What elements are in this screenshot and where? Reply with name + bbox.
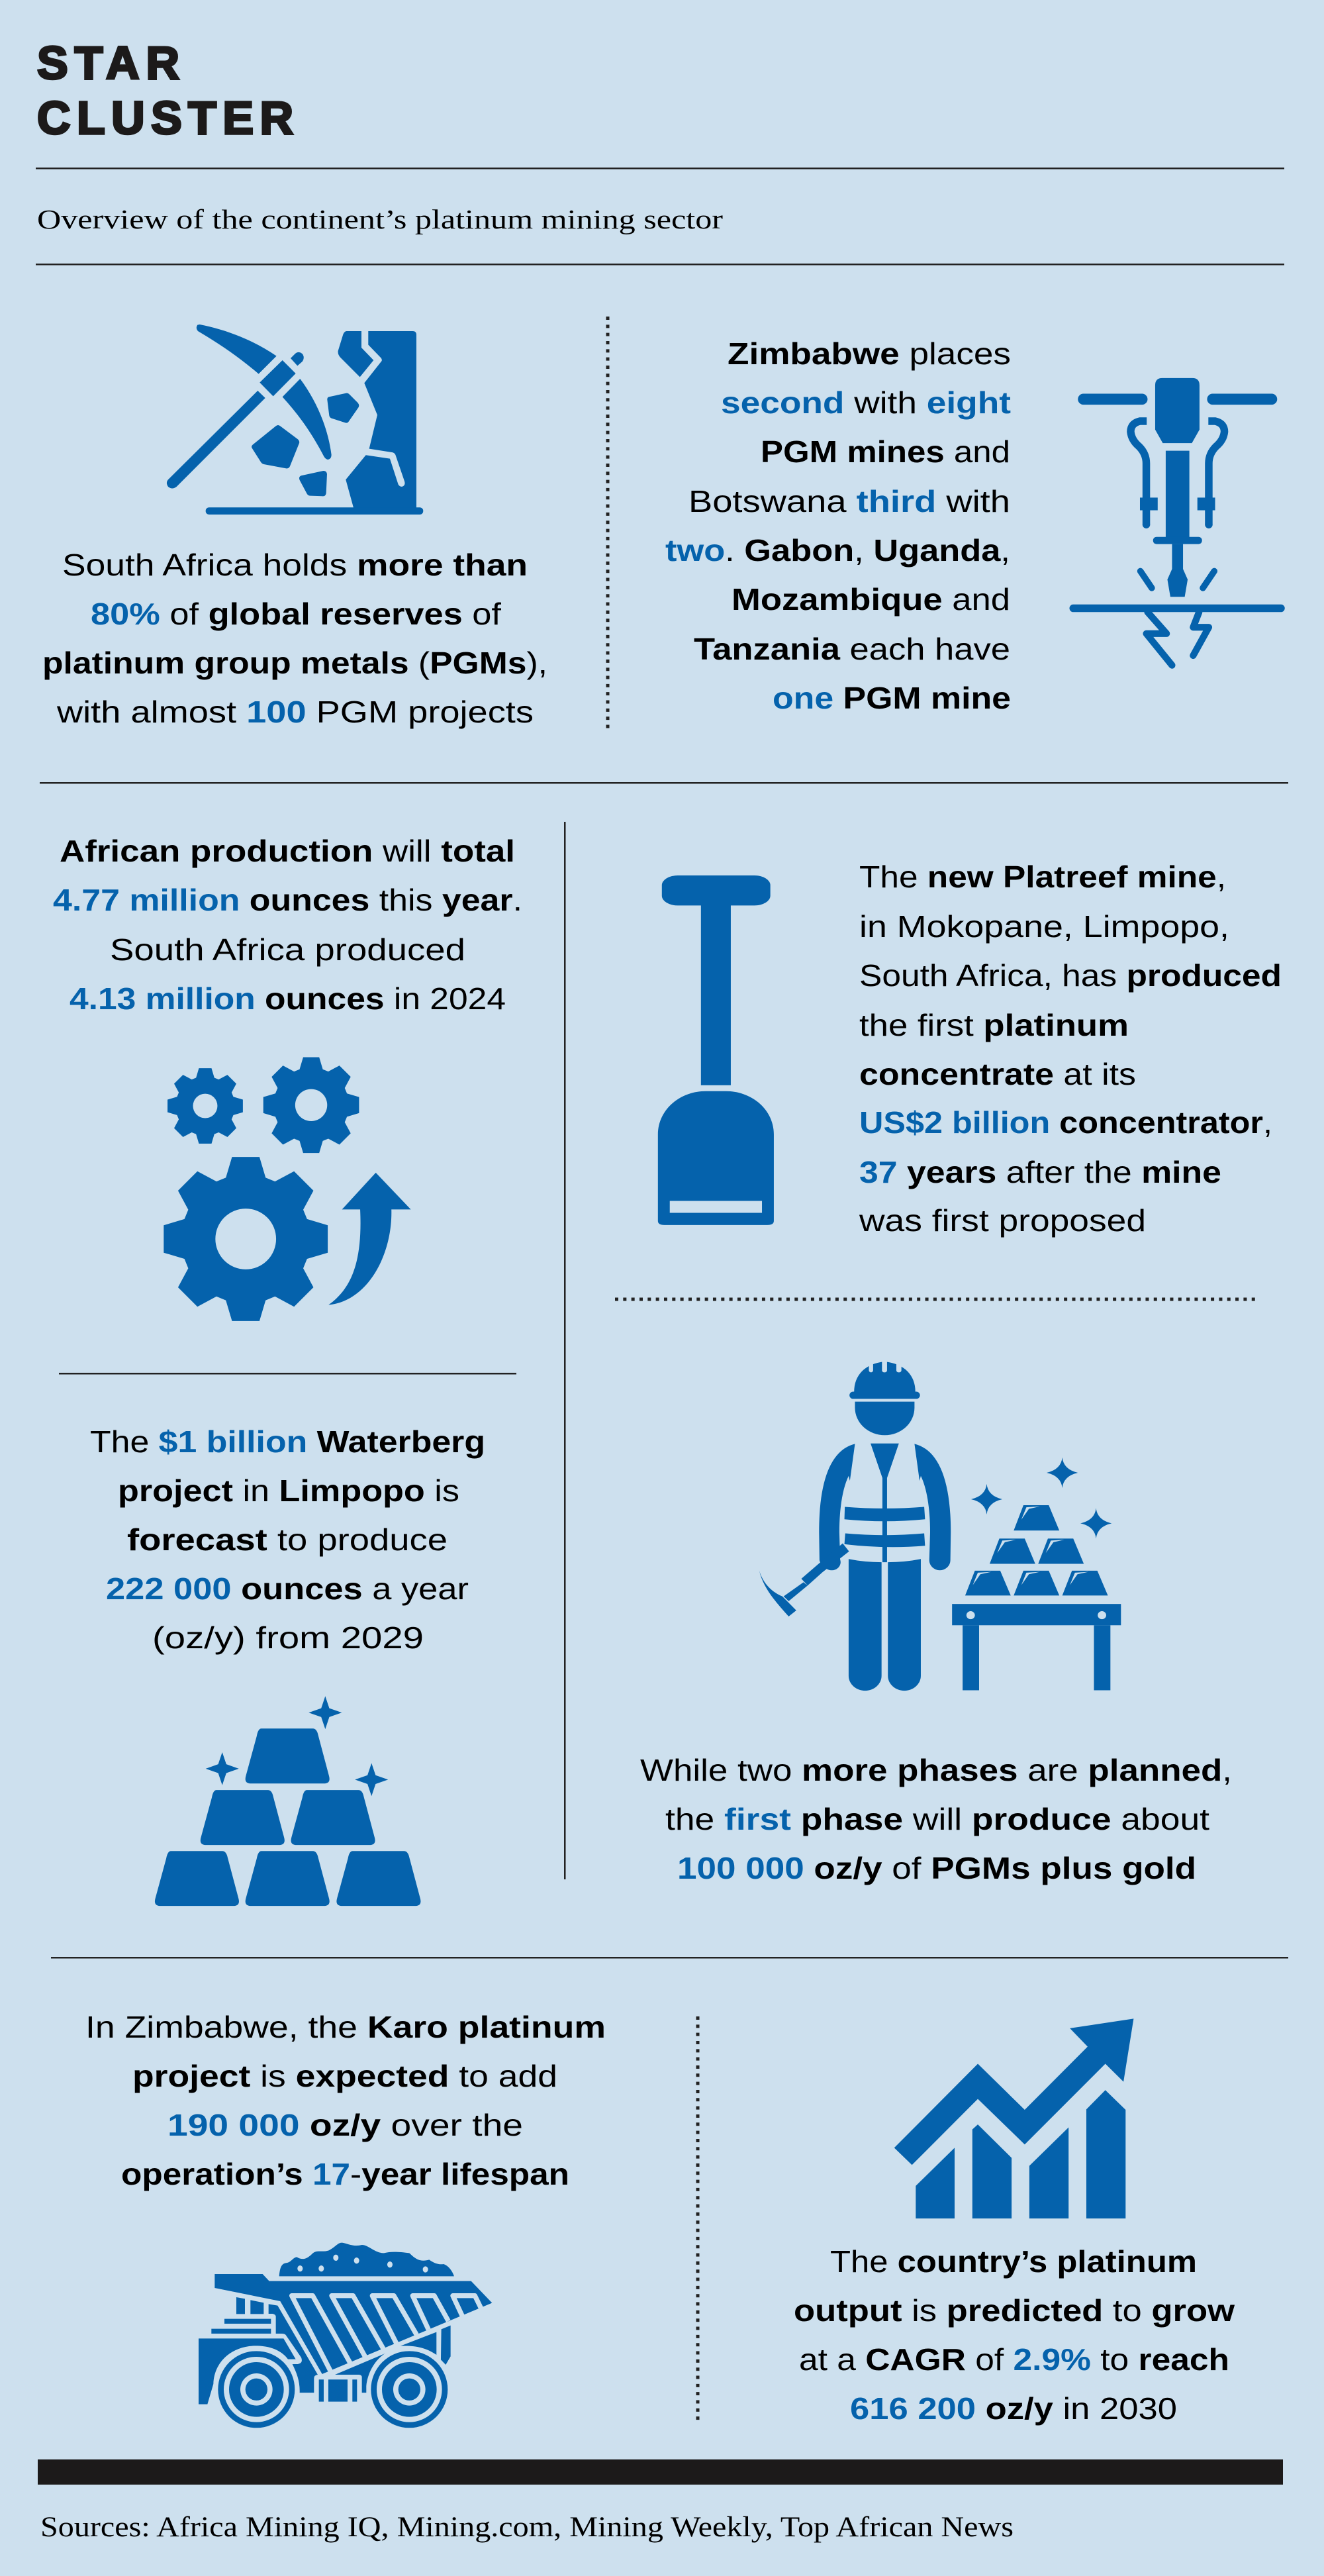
- text: platinum output growth: at a CAGR of 2.9% to reach: [799, 2342, 1229, 2377]
- icon: jackhammer: [1069, 378, 1285, 666]
- text: South Africa reserves: with almost 100 PGM projects: [56, 695, 534, 729]
- footer bar: [38, 2459, 1283, 2485]
- text: Waterberg project: 222 000 ounces a year: [106, 1571, 469, 1606]
- text: first phase: [640, 1753, 1232, 1885]
- text: Waterberg project: project in Limpopo is: [118, 1473, 459, 1508]
- text: platinum output growth: The country’s platinum: [830, 2244, 1197, 2279]
- title: [37, 37, 293, 144]
- text: Zimbabwe second: PGM mines and: [761, 434, 1010, 469]
- text: Platreef mine: 37 years after the mine: [859, 1155, 1221, 1189]
- text: Platreef mine: South Africa, has produced: [859, 958, 1282, 993]
- text: Zimbabwe second: one PGM mine: [773, 681, 1011, 715]
- icon: rising chart: [894, 2018, 1133, 2218]
- icon: pickaxe and rock wall: [167, 324, 423, 515]
- text: African production: [53, 834, 522, 1016]
- text: Platreef mine: [859, 860, 1282, 1238]
- text: Zimbabwe second: Tanzania each have: [694, 632, 1010, 666]
- text: South Africa reserves: platinum group metals (PGMs ),: [42, 646, 547, 680]
- text: platinum output growth: output is predicted to grow: [794, 2293, 1235, 2328]
- text: South Africa reserves: South Africa holds more than: [62, 548, 528, 582]
- icon: gears and up arrow: [164, 1057, 411, 1321]
- text: South Africa reserves: [42, 548, 547, 729]
- text: platinum output growth: [794, 2244, 1235, 2426]
- title: STAR: [37, 37, 179, 89]
- text: Karo platinum project: 190 000 oz/y over the: [167, 2108, 523, 2142]
- text: Karo platinum project: operation’s 17-year lifespan: [121, 2157, 569, 2191]
- icon: miner and gold bars on a table: [759, 1360, 1121, 1691]
- icon: haul truck: [199, 2243, 492, 2428]
- text: Waterberg project: (oz/y) from 2029: [152, 1620, 424, 1655]
- text: Zimbabwe second: Mozambique and: [732, 582, 1010, 617]
- text: Waterberg project: forecast to produce: [127, 1522, 448, 1557]
- text: Platreef mine: was first proposed: [859, 1203, 1146, 1238]
- text: South Africa reserves: 80% of global reserves of: [91, 597, 501, 631]
- text: first phase: the first phase will produce about: [665, 1802, 1209, 1836]
- title: CLUSTER: [37, 92, 293, 144]
- text: African production: 4.13 million ounces in 2024: [70, 981, 506, 1016]
- text: Platreef mine: US$2 billion concentrator ,: [859, 1105, 1272, 1140]
- text: Zimbabwe second: Zimbabwe places: [728, 336, 1011, 371]
- text: African production: 4.77 million ounces this year .: [53, 883, 522, 917]
- text: Zimbabwe second: two. Gabon , Uganda ,: [665, 533, 1010, 568]
- icon: stacked gold bars: [155, 1696, 420, 1906]
- text: Waterberg project: The $1 billion Waterberg: [90, 1424, 485, 1459]
- text: Platreef mine: The new Platreef mine ,: [859, 860, 1226, 894]
- text: Platreef mine: the first platinum: [859, 1008, 1129, 1042]
- text: African production: South Africa produced: [110, 932, 465, 967]
- icon: shovel: [658, 875, 774, 1225]
- text: Karo platinum project: In Zimbabwe, the Karo platinum: [85, 2010, 606, 2044]
- text: Platreef mine: concentrate at its: [859, 1057, 1136, 1091]
- text: Karo platinum project: project is expected to add: [132, 2059, 557, 2093]
- text: African production: African production will total: [60, 834, 515, 868]
- sources: Sources: Africa Mining IQ, Mining.com, Mining Weekly, Top African News: [40, 2512, 1014, 2543]
- text: Zimbabwe second: Botswana third with: [688, 484, 1010, 519]
- text: Karo platinum project: [85, 2010, 606, 2191]
- text: Zimbabwe second: second with eight: [721, 385, 1011, 420]
- subtitle: Overview of the continent’s platinum mining sector: [37, 204, 723, 234]
- text: platinum output growth: 616 200 oz/y in 2030: [850, 2391, 1177, 2426]
- text: first phase: While two more phases are planned ,: [640, 1753, 1232, 1787]
- text: first phase: 100 000 oz/y of PGMs plus gold: [677, 1851, 1196, 1885]
- text: Zimbabwe second: [665, 336, 1011, 715]
- text: Platreef mine: in Mokopane, Limpopo,: [859, 909, 1229, 944]
- text: Waterberg project: [90, 1424, 485, 1655]
